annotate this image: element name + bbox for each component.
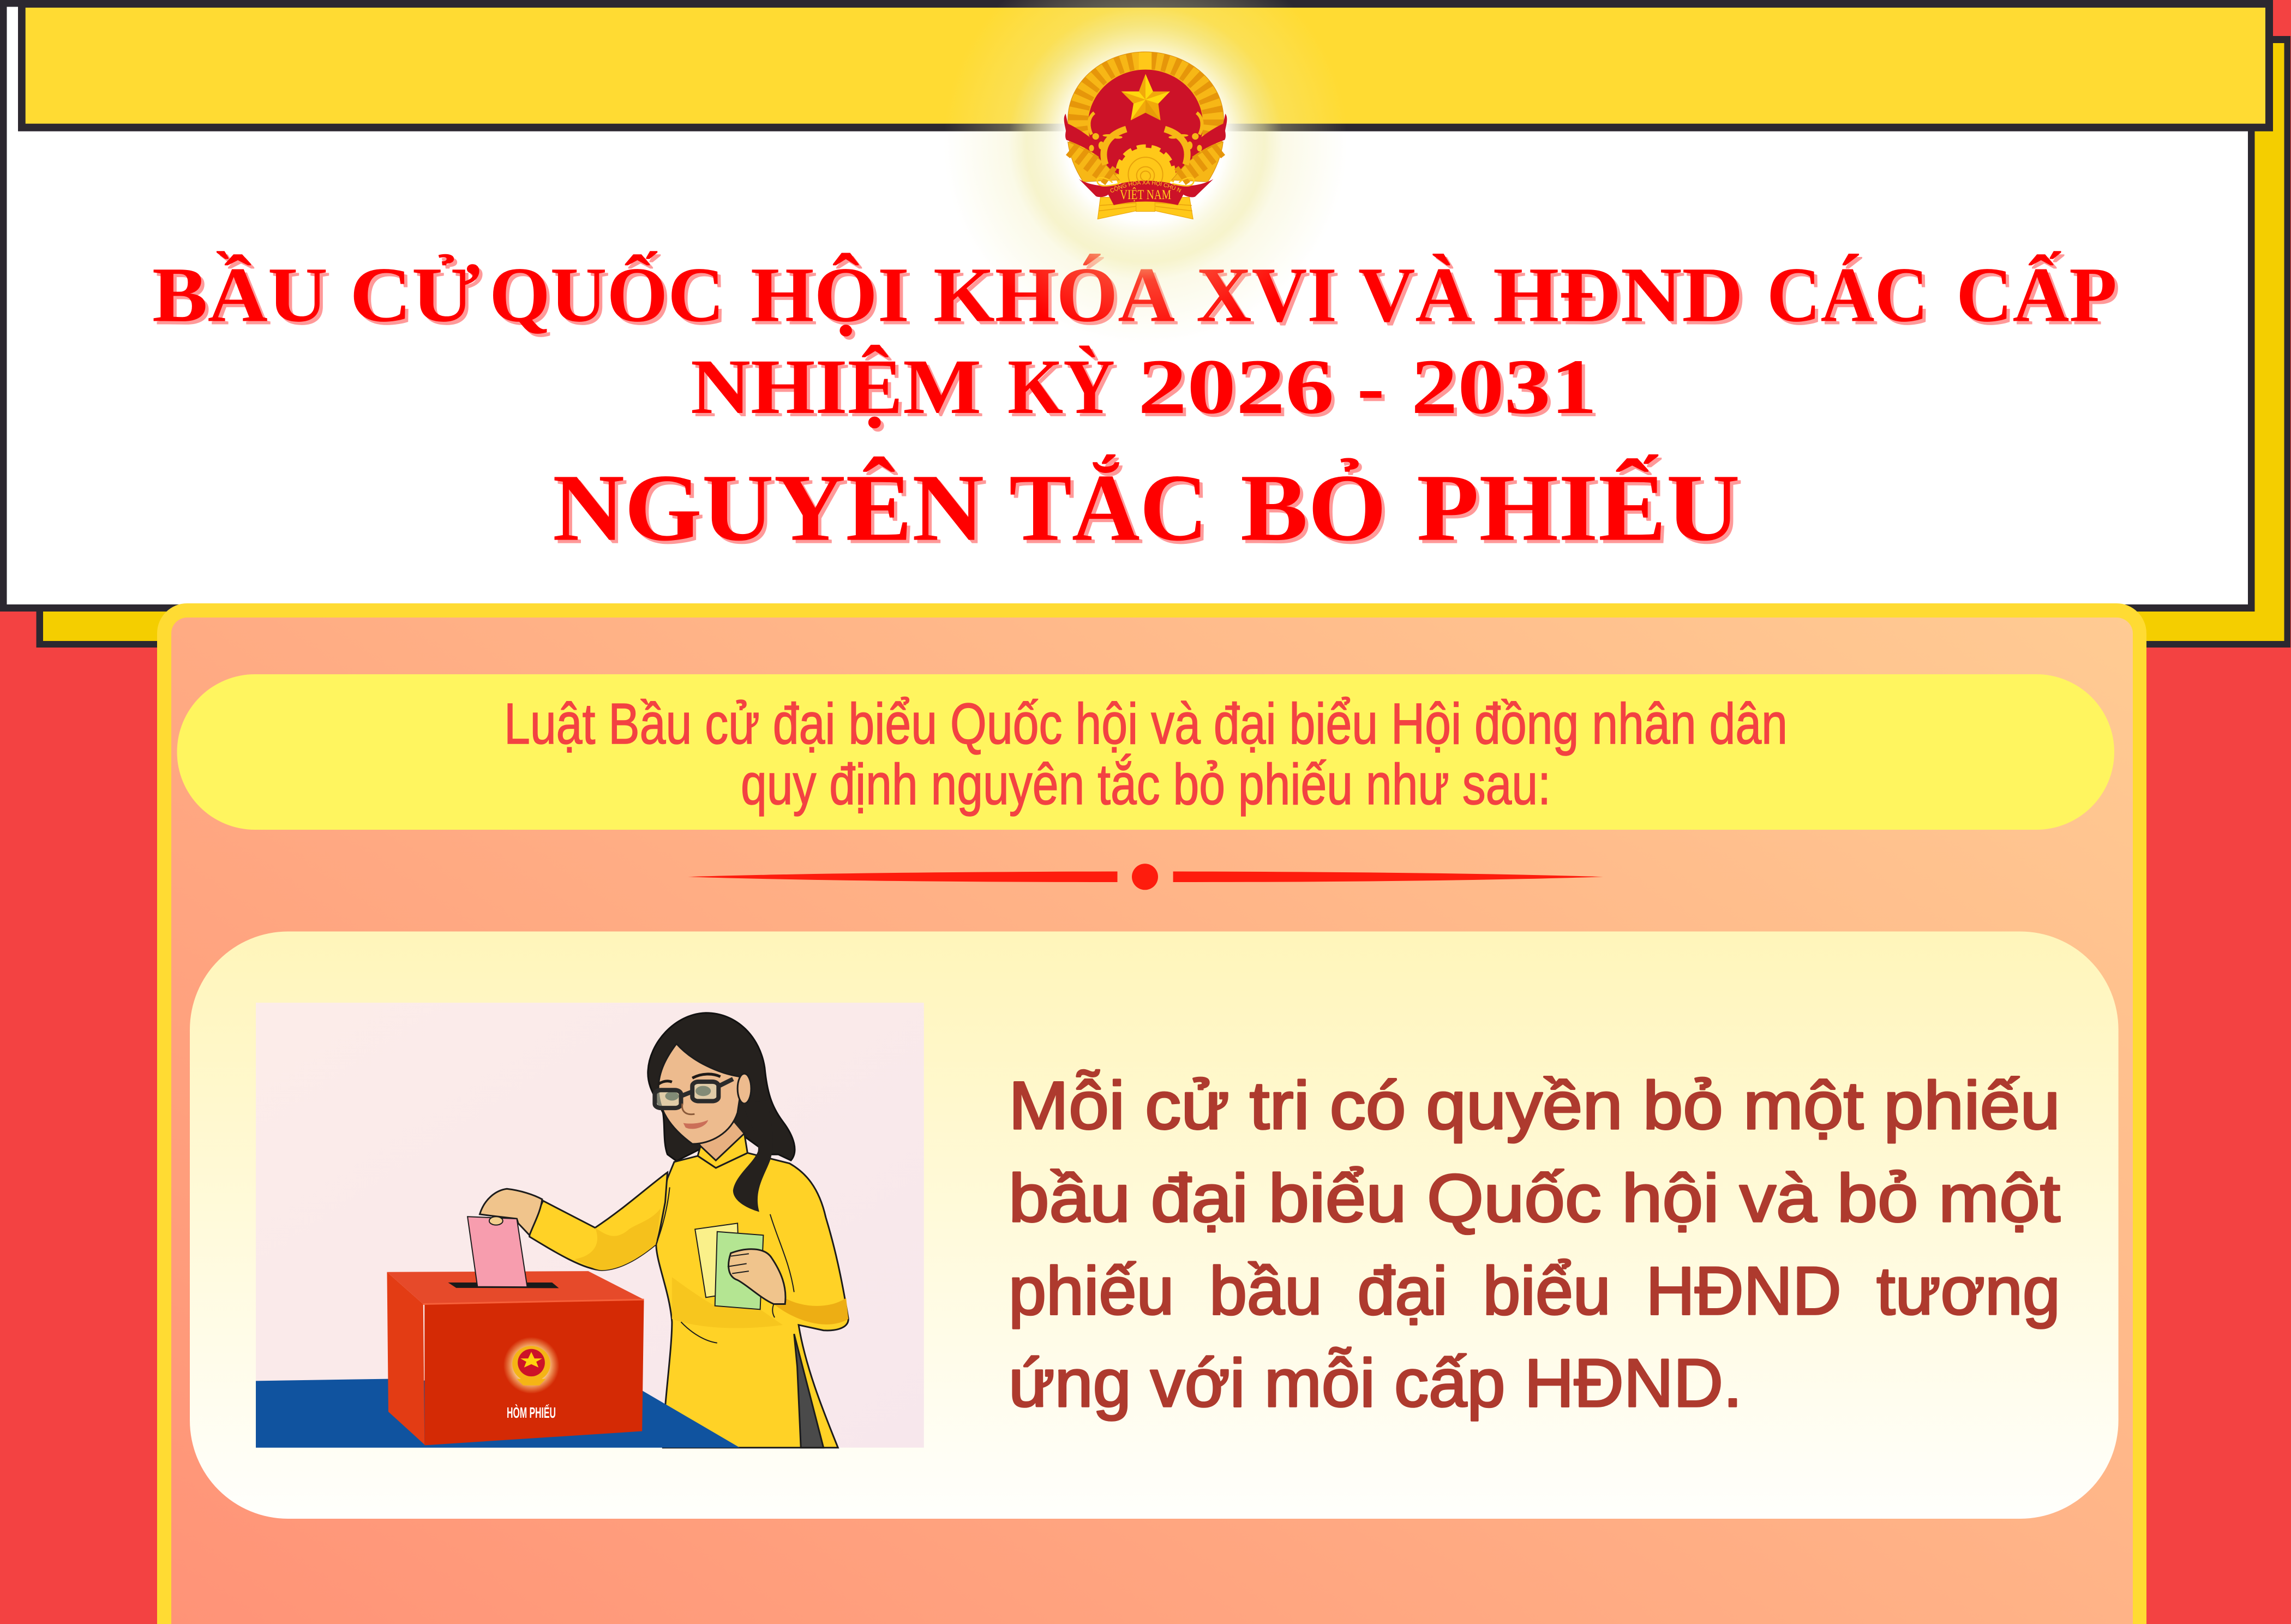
panel: main content card (157, 603, 2146, 1624)
banner scroll line (1097, 178, 1194, 186)
panel: back yellow frame (36, 36, 2290, 648)
intro text: Luật Bầu cử đại biểu Quốc hội và đại biểu Hội đồng nhân dân (504, 692, 1788, 756)
illustration: woman casting ballot (256, 1003, 924, 1448)
green ballot (715, 1232, 763, 1309)
body text: ứng với mỗi cấp HĐND. (1009, 1346, 1742, 1421)
title block: NGUYÊN (553, 455, 984, 561)
title block (152, 251, 2117, 561)
collar (698, 1134, 747, 1168)
title block: BỎ (1240, 455, 1387, 561)
intro text: quy định nguyên tắc bỏ phiếu như sau: (741, 752, 1551, 817)
red banner (1079, 179, 1213, 205)
face (658, 1044, 740, 1144)
fan base (1097, 197, 1193, 219)
divider ornament (688, 864, 1603, 890)
nose and mouth (682, 1104, 694, 1114)
icon: national emblem (1064, 51, 1227, 219)
box left face (387, 1272, 424, 1445)
ribbon and rice, left side (1064, 113, 1126, 182)
blue table (256, 1379, 740, 1448)
ribbon and rice, right side (1165, 113, 1227, 182)
mini emblem on box (503, 1337, 559, 1394)
body text: bầu đại biểu Quốc hội và bỏ một (1009, 1161, 2060, 1236)
gear (1119, 148, 1172, 198)
title block: KỲ (1007, 344, 1115, 430)
thumb (489, 1216, 503, 1225)
body text: phiếu bầu đại biểu HĐND tương (1009, 1254, 2060, 1329)
title block: TẮC (1009, 454, 1208, 561)
title block: PHIẾU (1417, 454, 1740, 561)
glasses (655, 1079, 733, 1108)
panel: white title panel (0, 0, 2255, 612)
body text (1009, 1068, 2060, 1421)
emblem motto: CỘNG HÒA XÃ HỘI CHỦ NGHĨA (1110, 179, 1182, 193)
title block: KHÓA (933, 252, 1175, 338)
box front face (424, 1300, 644, 1445)
brows (658, 1074, 721, 1084)
box top face (387, 1271, 644, 1304)
fold lines (656, 1188, 794, 1343)
star (1121, 74, 1170, 121)
title block: NHIỆM (691, 344, 981, 430)
title block: CỬ (350, 252, 480, 338)
dark trouser panel (794, 1334, 824, 1448)
title block: VÀ (1358, 252, 1472, 338)
intro pill (177, 674, 2114, 830)
title block: 2026 (1138, 344, 1334, 430)
title block: 2031 (1411, 344, 1597, 430)
title block: BẦU (152, 251, 328, 338)
wheat wreath (1068, 52, 1224, 180)
title block: CẤP (1956, 251, 2117, 338)
title block: XVI (1196, 252, 1337, 338)
right hand (729, 1249, 785, 1304)
woman: back hair (648, 1013, 795, 1161)
intro text (504, 692, 1788, 817)
emblem motto: VIỆT NAM (1120, 187, 1171, 202)
raised hand (479, 1189, 542, 1235)
emblem glow (938, 0, 1353, 349)
woman: neck (699, 1122, 746, 1168)
title block: HĐND (1493, 252, 1743, 338)
title block: HỘI (751, 252, 909, 338)
panel: top yellow bar (18, 0, 2273, 131)
dress shading (773, 1298, 848, 1325)
eyes (665, 1086, 711, 1100)
content panel (190, 932, 2119, 1519)
sleeve arm (530, 1172, 668, 1270)
title block: - (1357, 344, 1384, 430)
ear (737, 1074, 751, 1104)
pink ballot (467, 1216, 527, 1287)
yellow ballot (695, 1223, 740, 1297)
long hair lock (733, 1100, 773, 1212)
red field (1088, 70, 1203, 175)
title block: CÁC (1767, 252, 1928, 338)
body text: Mỗi cử tri có quyền bỏ một phiếu (1009, 1068, 2060, 1143)
woman: dress body (656, 1153, 848, 1448)
slot (448, 1283, 559, 1288)
emblem motto (1110, 179, 1182, 202)
title block: QUỐC (489, 251, 724, 338)
ballot box label: HÒM PHIẾU (507, 1404, 556, 1421)
